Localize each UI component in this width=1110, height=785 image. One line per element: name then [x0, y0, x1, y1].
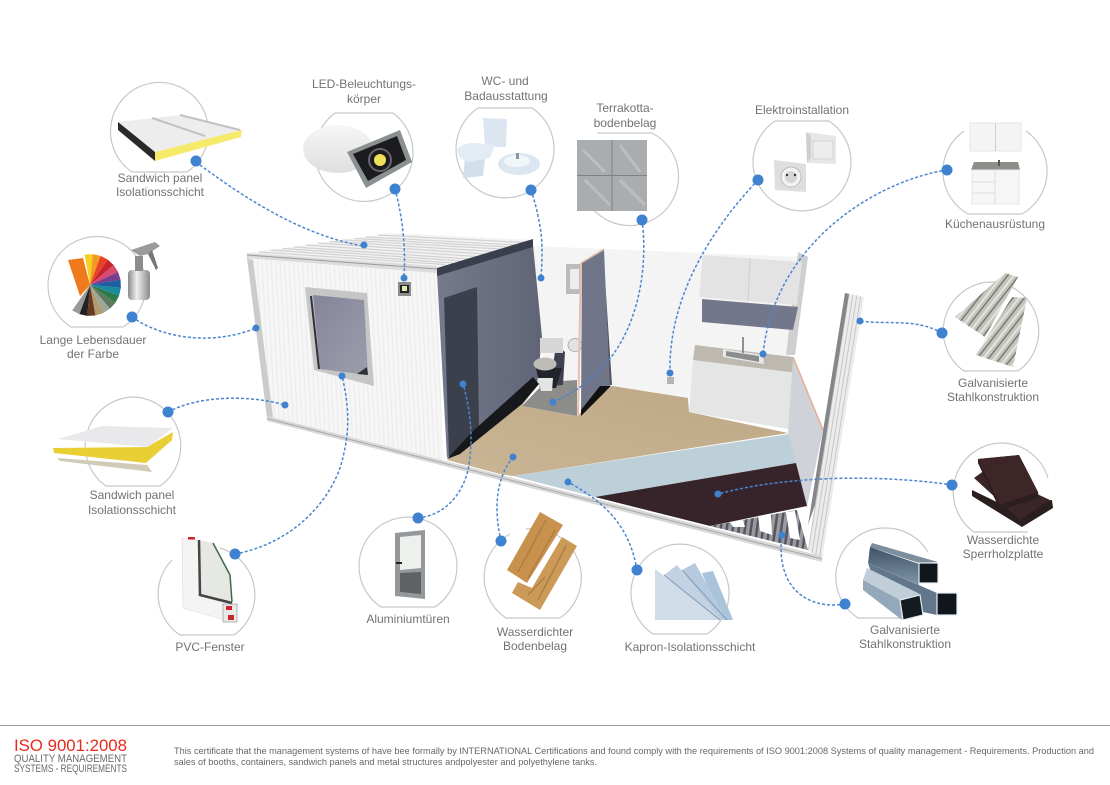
insulation layer [513, 434, 796, 497]
label: Terrakotta- [596, 101, 654, 115]
door [395, 530, 425, 599]
label: Isolationsschicht [88, 503, 177, 517]
upper kitchen cabinet [699, 255, 802, 305]
kitchen base unit [971, 160, 1020, 204]
top tube [868, 543, 938, 585]
ISO subheading: QUALITY MANAGEMENT [14, 753, 127, 765]
socket [774, 160, 806, 192]
footer [0, 725, 1110, 775]
window profile [182, 537, 237, 622]
connector dots [126, 156, 958, 610]
wall lamp [398, 282, 411, 296]
label: Galvanisierte [958, 376, 1028, 390]
card: sandwich wall panel [53, 397, 181, 517]
wall switch [806, 132, 836, 164]
sandwich panel image [118, 115, 242, 161]
bathroom tile floor [522, 380, 577, 416]
card: LED lighting [303, 77, 416, 201]
certificate text: sales of booths, containers, sandwich panels and metal structures andpolyester and polyethylene tanks. [174, 757, 597, 768]
insulation sheets [655, 563, 733, 620]
kitchen base cabinet [689, 360, 796, 429]
label: Galvanisierte [870, 623, 940, 637]
card: aluminium door [359, 517, 457, 626]
front wall [247, 255, 443, 461]
window [305, 287, 374, 386]
card: WC [456, 74, 554, 198]
toilet image [457, 118, 507, 178]
dark inner door [444, 287, 479, 457]
card: kitchen [943, 123, 1047, 231]
container building illustration [247, 233, 864, 562]
card: galvanized steel right [943, 273, 1039, 404]
dashed connectors [132, 162, 952, 605]
roof [247, 233, 533, 273]
label: Badausstattung [464, 89, 548, 103]
label: Sandwich panel [118, 171, 202, 185]
ISO subheading: SYSTEMS - REQUIREMENTS [14, 763, 127, 775]
steel sheets [955, 273, 1027, 367]
inner grey wall [437, 245, 542, 458]
front tube [863, 568, 923, 620]
kitchen wall unit [970, 123, 1021, 151]
sink and faucet [723, 337, 764, 364]
layered panel [53, 426, 173, 472]
bottom rail [267, 416, 822, 562]
card: PVC window [158, 537, 255, 654]
plywood boards [972, 455, 1053, 527]
label: Lange Lebensdauer [40, 333, 146, 347]
label: Küchenausrüstung [945, 217, 1045, 231]
wall socket [667, 377, 674, 384]
wall fascia [437, 239, 533, 276]
toilet [534, 338, 565, 391]
label: Isolationsschicht [116, 185, 205, 199]
floor shadow [447, 377, 539, 459]
label: bodenbelag [594, 116, 656, 130]
spray gun [128, 242, 160, 300]
label: LED-Beleuchtungs- [312, 77, 416, 91]
partition wall [578, 249, 612, 416]
label: Aluminiumtüren [366, 612, 450, 626]
rear corner post [786, 252, 808, 355]
label: der Farbe [67, 347, 119, 361]
bathroom window [566, 264, 581, 294]
label: WC- und [481, 74, 529, 88]
LED floodlight [347, 130, 412, 188]
wood floor [447, 385, 788, 476]
card: kapron insulation [625, 544, 756, 654]
ISO heading: ISO 9001:2008 [14, 736, 127, 755]
tile image [577, 140, 647, 211]
wash basin [498, 153, 540, 175]
label: PVC-Fenster [175, 640, 245, 654]
card: sandwich panel roof [110, 82, 242, 199]
card: paint [40, 236, 160, 361]
card: waterproof flooring [484, 512, 581, 653]
label: Kapron-Isolationsschicht [625, 640, 756, 654]
plywood layer [595, 463, 807, 526]
wood planks [507, 512, 577, 610]
LED dome lamp [303, 125, 373, 173]
cabinet shadow wall [702, 299, 798, 330]
right post [808, 293, 864, 560]
label: Sperrholzplatte [963, 547, 1044, 561]
certificate text: This certificate that the management systems of have bee formally by INTERNATIONAL Certifications and found comply with the requirements of ISO 9001:2008 Systems of quality management - Requirements. Production and [174, 746, 1094, 757]
right tube [868, 563, 957, 615]
label: Bodenbelag [503, 639, 567, 653]
card: electrical [753, 103, 851, 211]
card: waterproof plywood [953, 443, 1053, 561]
label: Sandwich panel [90, 488, 174, 502]
steel floor beams [710, 510, 808, 550]
label: Wasserdichte [967, 533, 1039, 547]
countertop [693, 345, 797, 373]
label: Stahlkonstruktion [947, 390, 1039, 404]
corner post left [247, 258, 273, 418]
label: Elektroinstallation [755, 103, 849, 117]
label: Stahlkonstruktion [859, 637, 951, 651]
back wall [533, 246, 800, 398]
label: körper [347, 92, 381, 106]
bathroom sink [568, 338, 582, 352]
card: galvanized steel bottom [836, 528, 957, 651]
label: Wasserdichter [497, 625, 573, 639]
steel tubes [863, 543, 957, 620]
right wall [788, 357, 823, 507]
card: terracotta flooring [577, 101, 679, 226]
colour fan [68, 254, 121, 316]
